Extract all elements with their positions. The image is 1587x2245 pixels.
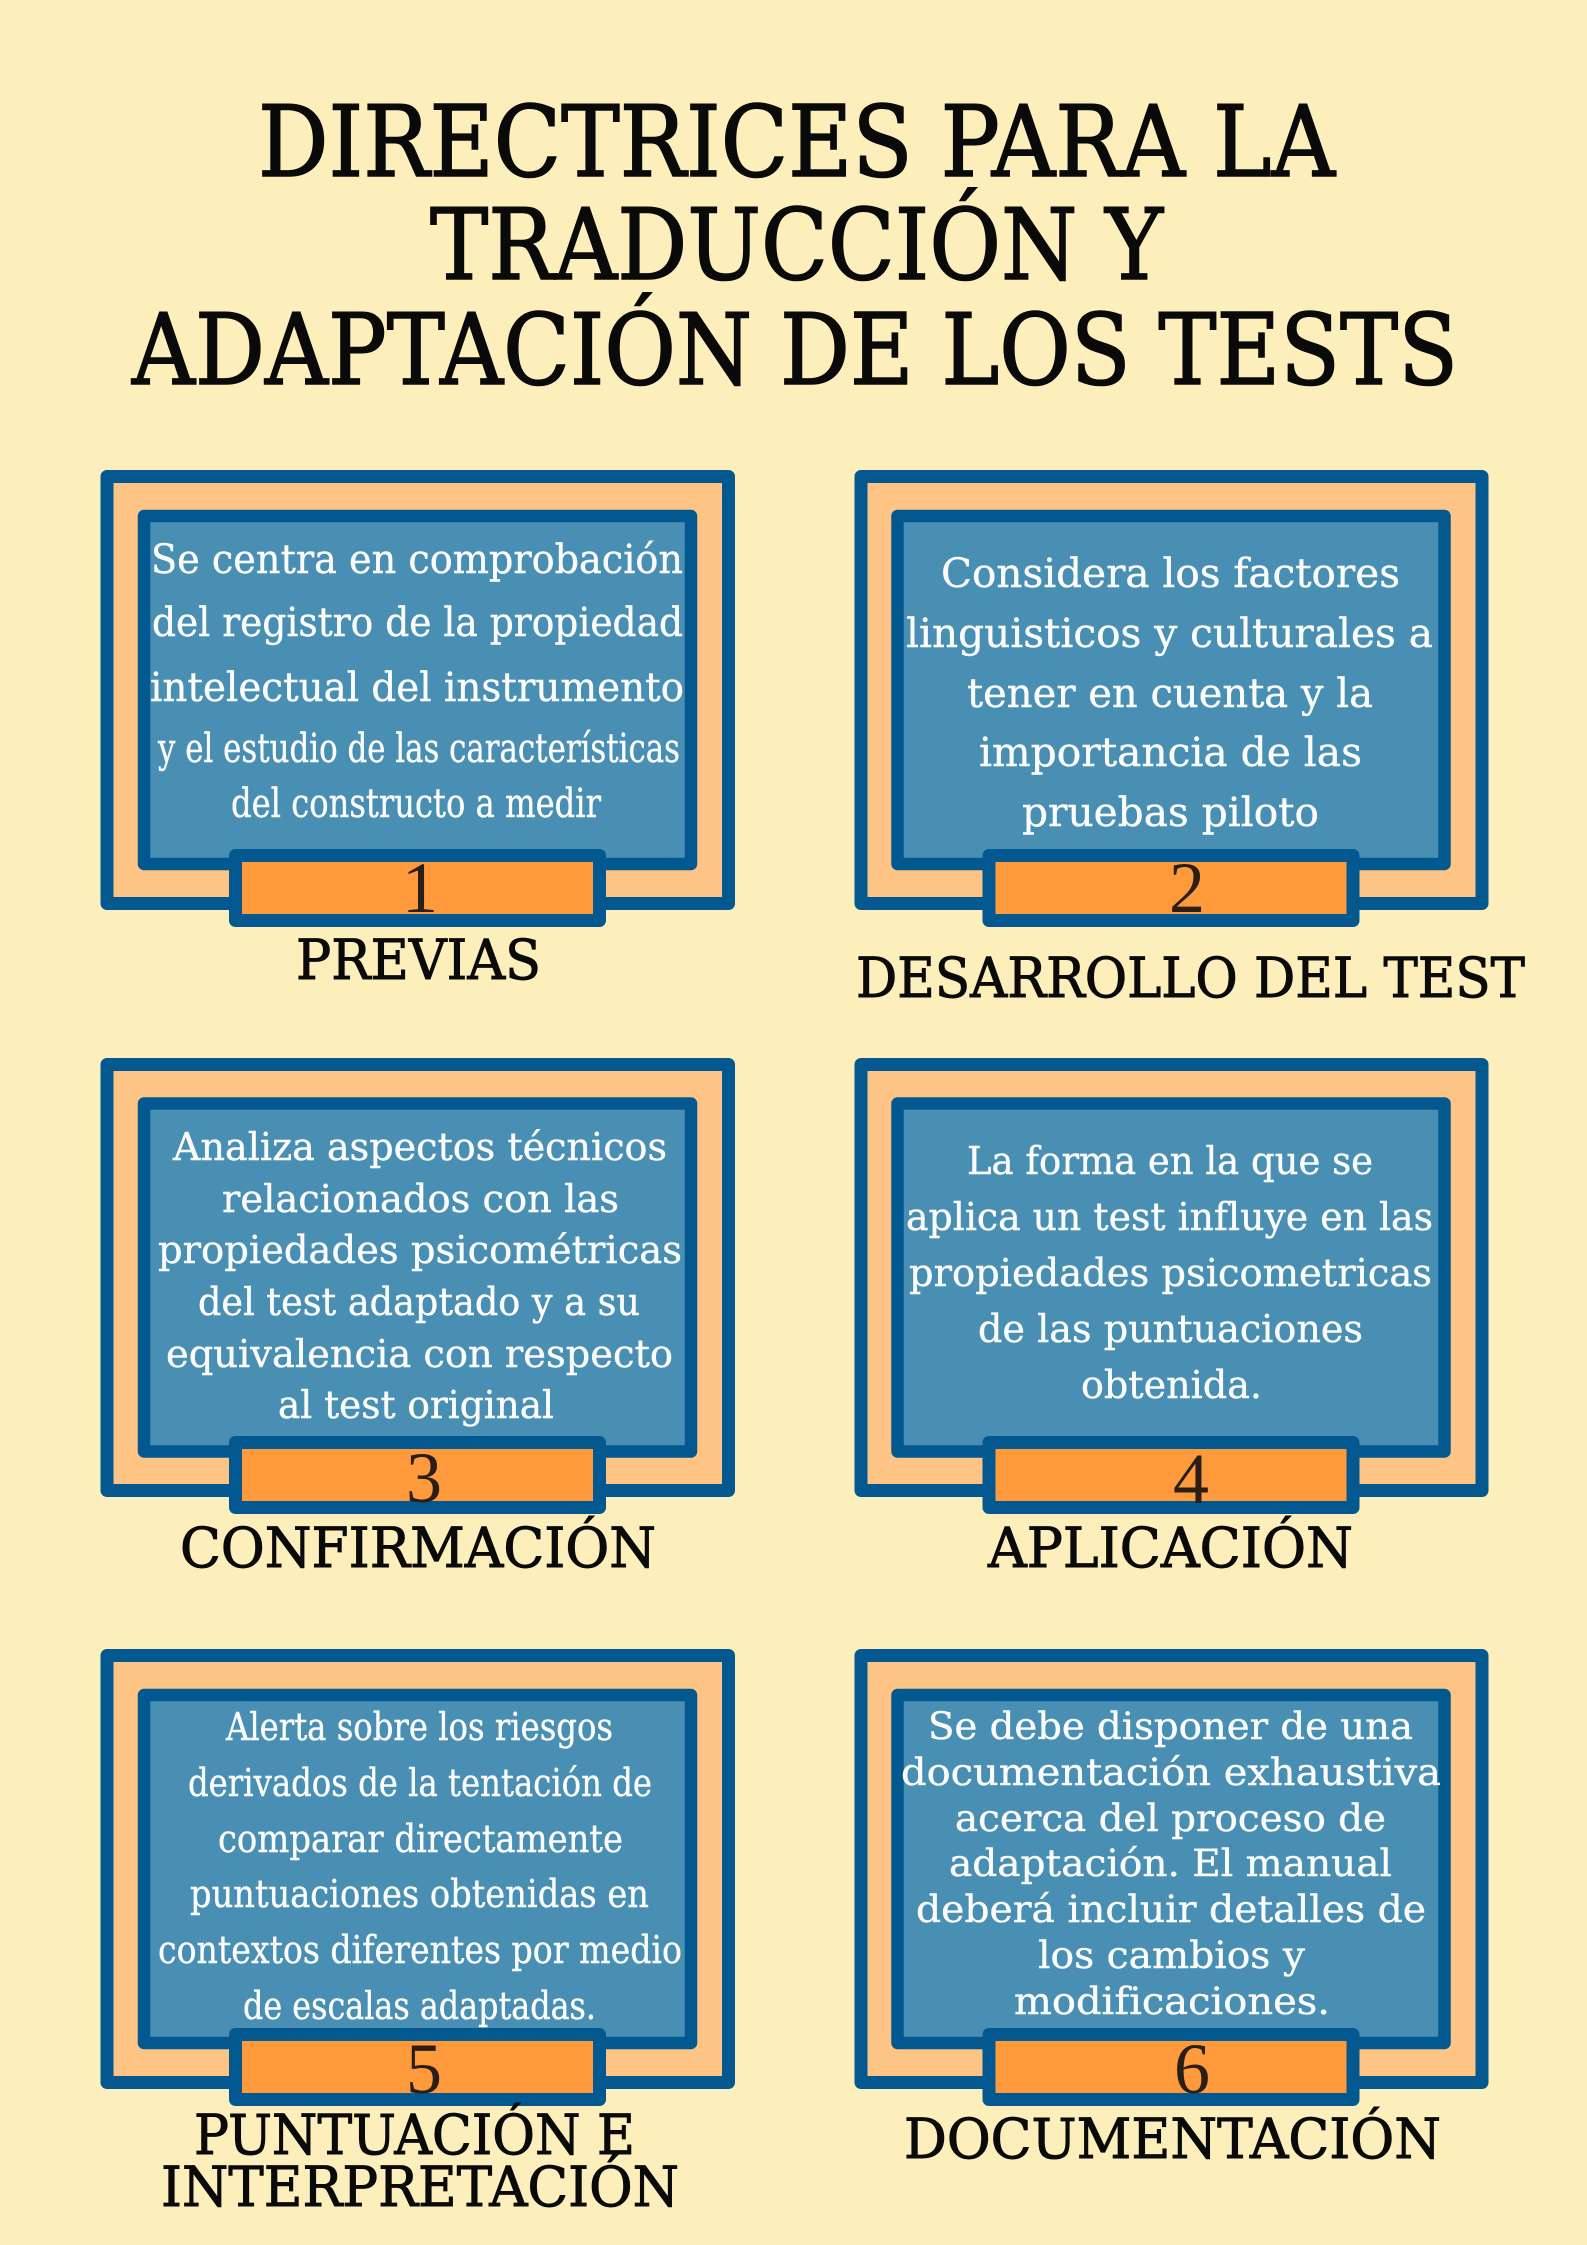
number 5: 5 (406, 2029, 442, 2109)
text block: documentación description: documentación exhaustiva (901, 1751, 1441, 1794)
text block: desarrollo description (906, 551, 1433, 836)
text block: previas description: intelectual del instrumento (150, 665, 684, 711)
number 6: 6 (1174, 2029, 1210, 2109)
heading: desarrollo del test: DESARROLLO DEL TEST (856, 946, 1525, 1010)
text block: desarrollo description: importancia de las (979, 730, 1362, 776)
heading: puntuación e interpretación: INTERPRETACIÓN (161, 2155, 679, 2219)
text block: previas description: del constructo a medir (231, 781, 602, 827)
panel: 5 puntuación e interpretación (107, 1656, 728, 2109)
text block: aplicación description (906, 1139, 1433, 1407)
heading: aplicación: APLICACIÓN (987, 1516, 1353, 1580)
text block: documentación description: adaptación. El manual (949, 1842, 1392, 1885)
text block: confirmación description: relacionados con las (222, 1177, 619, 1221)
text block: documentación description: acerca del proceso de (955, 1797, 1386, 1840)
text block: documentación description: modificaciones. (1014, 1980, 1330, 2023)
text block: confirmación description: propiedades psicométricas (158, 1228, 682, 1272)
text block: puntuación description: comparar directamente (218, 1817, 623, 1861)
title: ADAPTACIÓN DE LOS TESTS (131, 293, 1458, 408)
panel: 3 confirmación (107, 1064, 728, 1518)
text block: previas description (150, 537, 684, 827)
text block: aplicación description: aplica un test influye en las (906, 1195, 1433, 1239)
text block: puntuación description: contextos diferentes por medio (158, 1928, 682, 1972)
text block: confirmación description (158, 1125, 682, 1427)
number 3: 3 (406, 1438, 442, 1518)
text block: aplicación description: obtenida. (1081, 1363, 1262, 1407)
title: DIRECTRICES PARA LA (258, 86, 1336, 200)
text block: aplicación description: La forma en la que se (967, 1139, 1373, 1183)
panel: 2 desarrollo del test (861, 476, 1482, 928)
text block: puntuación description: derivados de la tentación de (188, 1761, 652, 1805)
text block: aplicación description: de las puntuaciones (978, 1307, 1363, 1351)
text block: puntuación description (158, 1705, 682, 2028)
number 1: 1 (402, 848, 438, 928)
text block: documentación description: Se debe disponer de una (928, 1705, 1413, 1748)
text block: confirmación description: al test original (278, 1383, 554, 1427)
text block: confirmación description: equivalencia con respecto (166, 1332, 673, 1376)
text block: desarrollo description: Considera los factores (941, 551, 1400, 597)
number 4: 4 (1173, 1439, 1209, 1519)
text block: puntuación description: de escalas adaptadas. (243, 1984, 596, 2028)
number 2: 2 (1169, 848, 1205, 928)
text block: documentación description (901, 1705, 1441, 2023)
text block: previas description: Se centra en comprobación (151, 537, 683, 583)
heading: confirmación: CONFIRMACIÓN (180, 1516, 656, 1580)
heading: puntuación e interpretación: PUNTUACIÓN E (194, 2103, 635, 2167)
heading: documentación: DOCUMENTACIÓN (904, 2107, 1441, 2171)
text block: previas description: y el estudio de las características (157, 726, 680, 772)
panel: 4 aplicación (861, 1064, 1482, 1519)
panel: 1 previas (107, 476, 728, 928)
text block: puntuación description: Alerta sobre los riesgos (225, 1705, 613, 1749)
text block: desarrollo description: linguisticos y culturales a (906, 611, 1433, 657)
text block: puntuación description: puntuaciones obtenidas en (190, 1872, 649, 1916)
text block: documentación description: los cambios y (1038, 1934, 1305, 1977)
title: TRADUCCIÓN Y (430, 188, 1164, 303)
text block: confirmación description: del test adaptado y a su (198, 1280, 640, 1324)
text block: aplicación description: propiedades psicometricas (909, 1251, 1432, 1295)
heading: previas: PREVIAS (296, 928, 541, 992)
title (131, 86, 1458, 408)
panel: 6 documentación (861, 1656, 1482, 2109)
text block: desarrollo description: pruebas piloto (1022, 790, 1319, 836)
text block: documentación description: deberá incluir detalles de (916, 1888, 1426, 1931)
text block: desarrollo description: tener en cuenta y la (967, 671, 1373, 717)
heading: puntuación e interpretación (161, 2103, 679, 2219)
text block: confirmación description: Analiza aspectos técnicos (172, 1125, 667, 1169)
text block: previas description: del registro de la propiedad (152, 600, 683, 646)
